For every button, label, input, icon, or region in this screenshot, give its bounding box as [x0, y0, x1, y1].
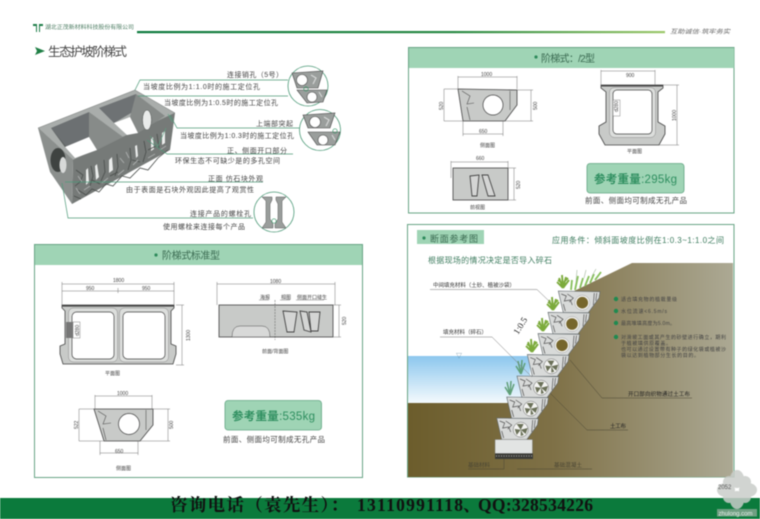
callout text: 使用螺栓来连接每个产品	[163, 222, 245, 231]
callout: reference weight 295kg	[587, 164, 684, 193]
drawing: plan view: 900	[626, 73, 635, 79]
label: infill soil	[430, 281, 550, 302]
label: geotextile: 土工布	[610, 422, 626, 430]
label: geotextile at opening	[570, 360, 692, 398]
product illustration: hollow block	[38, 90, 175, 204]
stone mottling	[74, 134, 168, 199]
drawing: plan view: d280	[75, 325, 81, 336]
label: foundation material	[468, 459, 504, 469]
feature list: 袋以达到植物部分生长的目的。	[621, 352, 699, 359]
panel heading: 阶梯式标准型	[162, 249, 220, 262]
callout text: 环保生态不可缺少是的多孔空间	[175, 156, 280, 165]
label: gravel infill	[440, 328, 532, 377]
drawing: plan view	[60, 278, 192, 377]
drawing: side view: 侧面图	[480, 142, 495, 149]
drawing: side view	[74, 391, 175, 472]
chip: section heading: 断面参考图	[430, 233, 478, 244]
footer contact line: 、	[463, 495, 480, 515]
callout leader lines	[62, 80, 300, 218]
header slogan: 互助诚信·筑牢务实	[670, 28, 731, 36]
callout: reference weight 535kg: 参考重量:535kg	[232, 409, 315, 423]
callout text: 正、侧面开口部分	[227, 146, 287, 155]
drawing: front and back elevation: 前面/背面图	[262, 348, 288, 355]
drawing: front elevation	[451, 156, 522, 211]
watermark site: zhulong.com	[718, 511, 753, 517]
drawing: side view: 522	[74, 420, 80, 429]
drawing: side view: 520	[439, 101, 445, 110]
water body	[408, 356, 530, 403]
drawing: side view: 500	[533, 101, 539, 110]
footer bar	[0, 498, 760, 519]
slope ratio: 1:0.5	[511, 315, 530, 336]
feature list: 于植被填供原覆盖。	[621, 340, 671, 347]
header: company logo and name	[33, 23, 134, 32]
feature list: 对滑坡工面或其产生的砂壁进行确立，期利	[621, 334, 726, 341]
label: gravel infill: 填充材料（碎石）	[443, 328, 487, 336]
panel header bar	[409, 48, 734, 68]
feature list: 最高堆填高度为5.0m。	[621, 320, 675, 327]
company name: 湖北正茂新材料科技股份有限公司	[45, 23, 134, 31]
drawing: plan view: d280	[614, 101, 620, 112]
planted grass	[505, 269, 601, 395]
callout text: 当坡度比例为1:0.3时的施工定位孔	[180, 131, 294, 140]
drawing: front and back elevation: 相图	[281, 294, 291, 301]
panel heading: 阶梯式：/2型	[541, 52, 595, 65]
callout text: 当坡度比例为1:0.5时的施工定位孔	[164, 98, 278, 107]
drawing: side view: 500	[169, 420, 175, 429]
cavity one back walls	[51, 112, 89, 147]
callout text: 当坡度比例为1:1.0时的施工定位孔	[143, 82, 260, 91]
drawing: side view: 1000	[481, 72, 492, 78]
callout: reference weight 295kg: 参考重量:295kg	[594, 172, 677, 186]
label: geotextile at opening: 开口部向织物通过土工布	[628, 390, 690, 398]
drawing: front elevation: 660	[476, 156, 485, 162]
label: infill soil: 中间填充材料（土砂、植被沙袋）	[433, 281, 515, 289]
left end face	[38, 128, 73, 204]
label: foundation concrete	[517, 461, 592, 469]
inset: connection pin holes	[288, 66, 328, 106]
panel frame	[408, 48, 734, 213]
footer contact line	[170, 495, 593, 515]
front face openings	[86, 131, 165, 185]
drawing: side view	[439, 72, 539, 149]
page heading	[35, 45, 127, 59]
header rule	[137, 31, 665, 33]
application condition: 应用条件：倾斜面坡度比例在1:0.3~1:1.0之间	[552, 235, 724, 245]
cavity one side wall	[89, 112, 123, 150]
drawing: side view: 650	[479, 129, 488, 135]
drawing: front elevation: 520	[516, 180, 522, 189]
drawing: front elevation: 前视图	[470, 204, 485, 211]
icon: heading arrow	[35, 47, 45, 55]
panel frame	[408, 224, 734, 477]
drawing: plan view: 1000	[672, 110, 678, 121]
drawing: plan view: 平面图	[105, 371, 120, 377]
drawing: side view: 650	[115, 449, 124, 455]
front stone face	[72, 113, 175, 204]
footer contact line: QQ:328534226	[478, 495, 593, 515]
drawing: front and back elevation	[217, 279, 348, 355]
drawing: plan view: 950	[86, 286, 95, 292]
stacked step blocks	[497, 291, 600, 440]
cavity two side wall	[130, 94, 165, 133]
earth slope	[408, 263, 733, 477]
icon: header bullet	[534, 55, 538, 59]
drawing: side view: 侧面图	[116, 465, 131, 472]
watermark	[717, 470, 757, 517]
panel: cross-section reference	[408, 224, 734, 477]
note: gravel decision: 根据现场的情况决定是否导入碎石	[428, 255, 552, 265]
drawing: front and back elevation: 海报	[260, 294, 270, 301]
foundation base	[495, 440, 533, 459]
panel header bar	[35, 245, 362, 265]
watermark number: 2052	[718, 485, 732, 491]
drawing: front and back elevation: 侧面开口缝生	[297, 294, 327, 301]
callout text: 正面 仿石块外观	[208, 174, 263, 183]
inset: upper protrusion	[300, 110, 340, 150]
watermark flower	[717, 470, 757, 509]
drawing: plan view: 1800	[113, 278, 124, 284]
cavity two back walls	[99, 94, 136, 123]
drawing: plan view: 1300	[186, 330, 192, 341]
feature list: 适合填充物的植栽量级	[621, 296, 677, 303]
callout: reference weight 535kg	[225, 400, 322, 430]
label: geotextile	[550, 393, 628, 430]
water level symbol: ▽	[456, 353, 462, 360]
drawing: side view: 1000	[117, 391, 128, 397]
callout text: 由于表面是石块外观因此提高了观赏性	[126, 185, 254, 194]
drawing: plan view: 950	[142, 286, 151, 292]
icon: company logo	[33, 24, 43, 32]
block top rim	[38, 90, 175, 160]
feature list	[614, 296, 726, 359]
end face hole	[50, 148, 66, 173]
feature list: 也可以通过设置带有种子的绿化袋或植被沙	[621, 346, 726, 353]
callout text: 连接产品的螺栓孔	[190, 209, 251, 218]
footer contact line: 13110991118	[357, 495, 463, 515]
note: front and side options: 前面、侧面均可制成无孔产品	[223, 434, 325, 444]
inset: bolt hole	[254, 192, 294, 232]
drawing: plan view: 平面图	[627, 149, 642, 155]
panel: step type /2	[408, 48, 734, 213]
cavity two opening	[114, 117, 138, 135]
green callout anchors	[150, 114, 172, 146]
icon: header bullet	[154, 253, 158, 257]
label: foundation concrete: 基础混凝土	[554, 461, 582, 469]
chip: section heading	[417, 230, 484, 244]
panel frame	[34, 244, 362, 478]
panel: standard step type	[34, 244, 362, 478]
far wall hole	[142, 110, 152, 130]
cavity one opening	[65, 137, 97, 158]
label: foundation material: 基础材料	[468, 461, 490, 469]
callout text	[126, 70, 294, 231]
note: front and side options: 前面、侧面均可制成无孔产品	[585, 195, 687, 205]
cavity one near wall	[51, 128, 75, 158]
drawing: front and back elevation: 1080	[270, 279, 281, 285]
callout text: 上端部突起	[256, 119, 293, 128]
feature list: 水位流速<6.5m/s	[621, 308, 668, 315]
footer contact line: 咨询电话（袁先生）：	[170, 495, 348, 515]
drawing: front and back elevation: 520	[342, 316, 348, 325]
callout text: 连接销孔（5号）	[227, 70, 283, 79]
heading text: 生态护坡阶梯式	[48, 45, 127, 59]
drawing: plan view	[599, 70, 679, 155]
